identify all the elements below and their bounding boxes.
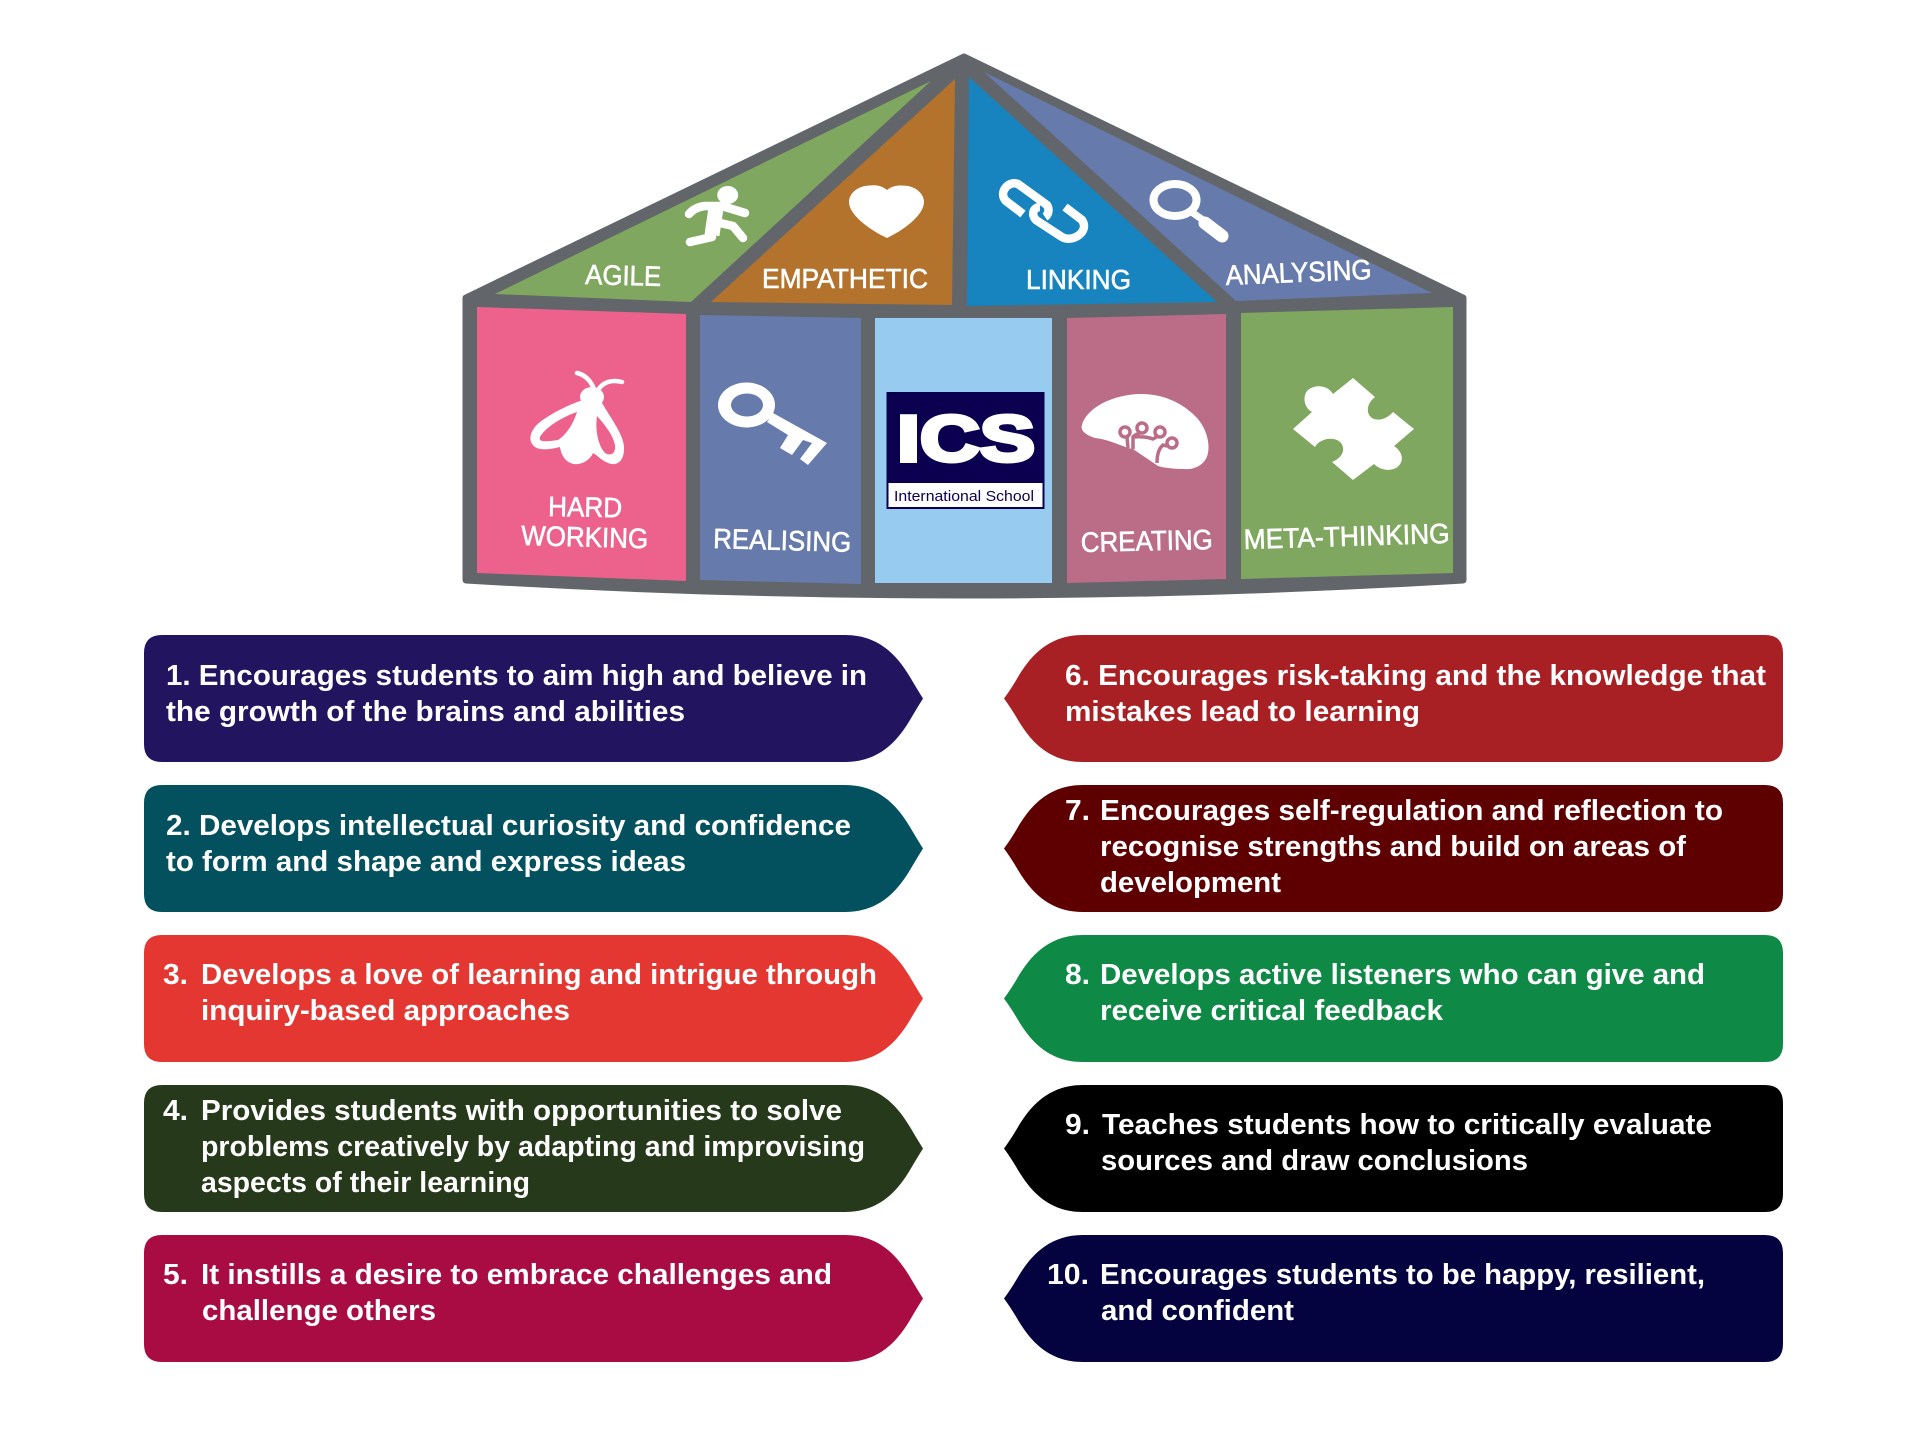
icon: magnifying glass — [1154, 184, 1222, 236]
label: realising: REALISING — [713, 523, 852, 558]
roof panel: agile — [495, 81, 931, 302]
house diagram — [466, 57, 1463, 595]
statement 5: 5. — [163, 1259, 188, 1291]
statement 4: aspects of their learning — [201, 1167, 530, 1199]
statement 3: inquiry-based approaches — [201, 995, 570, 1027]
statement 9: Teaches students how to critically evaluate — [1102, 1109, 1712, 1141]
statement 6: mistakes lead to learning — [1065, 696, 1420, 728]
roof panel: empathetic — [711, 79, 955, 305]
statement 10: Encourages students to be happy, resilient, — [1100, 1259, 1705, 1291]
statement 9: 9. — [1065, 1109, 1090, 1141]
statement 7: recognise strengths and build on areas of — [1100, 831, 1686, 863]
statement 4: problems creatively by adapting and improvising — [201, 1131, 865, 1163]
statement 7: 7. — [1065, 795, 1090, 827]
icon: heart — [849, 185, 924, 238]
label: hard working: HARD — [548, 491, 622, 523]
statement 2 — [144, 785, 923, 912]
statement 8: Develops active listeners who can give and — [1100, 959, 1705, 991]
statement 1: the growth of the brains and abilities — [166, 696, 685, 728]
statement 3: 3. — [163, 959, 188, 991]
wall panel: hard working — [477, 307, 686, 581]
house frame — [466, 57, 1463, 595]
ICS logo: ICS — [897, 402, 1035, 475]
statement 4 — [144, 1085, 923, 1212]
statement 4: Provides students with opportunities to solve — [201, 1095, 842, 1127]
label: empathetic: EMPATHETIC — [762, 263, 928, 294]
icon: chain link — [1003, 183, 1084, 239]
label: agile: AGILE — [585, 259, 662, 292]
statement 7: development — [1100, 867, 1281, 899]
statement 1 — [144, 635, 923, 762]
wall panel: creating — [1067, 314, 1226, 583]
statement 9: sources and draw conclusions — [1101, 1145, 1528, 1177]
statement 1: 1. Encourages students to aim high and believe in — [166, 660, 867, 692]
icon: brain — [1082, 394, 1209, 469]
statement 8: 8. — [1065, 959, 1090, 991]
label: linking: LINKING — [1026, 264, 1131, 295]
statement 10: 10. — [1047, 1259, 1089, 1291]
statement 3 — [144, 935, 923, 1062]
statement 10: and confident — [1101, 1295, 1294, 1327]
icon: puzzle piece — [1293, 378, 1414, 480]
statement 6: 6. Encourages risk-taking and the knowledge that — [1065, 660, 1766, 692]
label: hard working — [521, 491, 649, 554]
statement 5: challenge others — [202, 1295, 436, 1327]
statement 7 — [1004, 785, 1783, 912]
statement 6 — [1004, 635, 1783, 762]
statement 3: Develops a love of learning and intrigue through — [201, 959, 877, 991]
wall panel: logo — [875, 318, 1052, 583]
icon: running figure — [689, 186, 745, 242]
wall panel: realising — [700, 315, 861, 584]
label: hard working: WORKING — [521, 520, 649, 554]
label: creating: CREATING — [1080, 524, 1213, 558]
statement 5 — [144, 1235, 923, 1362]
statement 5: It instills a desire to embrace challenges and — [201, 1259, 832, 1291]
statement 9 — [1004, 1085, 1783, 1212]
label: analysing: ANALYSING — [1225, 254, 1372, 291]
label: meta-thinking: META-THINKING — [1243, 518, 1450, 555]
statement 10 — [1004, 1235, 1783, 1362]
icon: moth — [530, 373, 624, 464]
statement 2: to form and shape and express ideas — [166, 846, 686, 878]
statement 7: Encourages self-regulation and reflection to — [1100, 795, 1723, 827]
ICS logo: International School — [894, 488, 1034, 505]
roof panel: linking — [967, 77, 1217, 306]
statement 8: receive critical feedback — [1100, 995, 1444, 1027]
wall panel: meta-thinking — [1241, 307, 1453, 579]
statement 8 — [1004, 935, 1783, 1062]
statement 4: 4. — [163, 1095, 188, 1127]
roof panel: analysing — [984, 72, 1432, 301]
ICS logo — [886, 392, 1044, 509]
icon: key — [718, 382, 827, 465]
statement 2: 2. Develops intellectual curiosity and confidence — [166, 810, 851, 842]
